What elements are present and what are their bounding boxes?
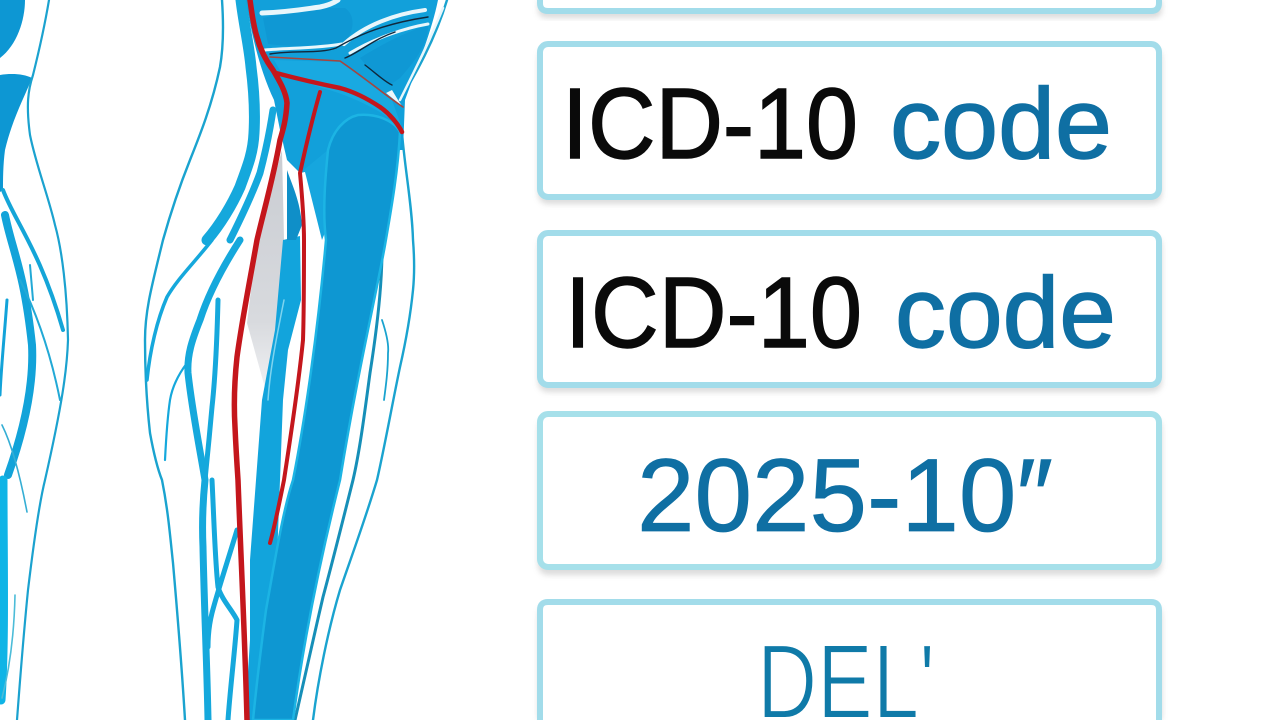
label: ICD-10 code: code: [890, 68, 1112, 180]
panel: ICD-10 code box two: [538, 233, 1162, 392]
tibial plateau: [274, 60, 402, 128]
main shin bone: [253, 115, 400, 720]
grey-white tissue area: [247, 150, 284, 395]
left leg outer contour: [17, 0, 68, 720]
label: ICD-10 code: code: [895, 257, 1116, 369]
blue between artery and bone: [300, 90, 332, 240]
panel: DEL box: [538, 602, 1162, 720]
femur condyle right: [360, 26, 428, 85]
left side muscle strands: [147, 0, 273, 720]
outer contour lines: [145, 0, 447, 720]
white joint bands: [262, 0, 443, 100]
illustration: main leg anatomy: [145, 0, 447, 720]
knee joint base: [246, 0, 438, 173]
dark joint lines: [270, 17, 428, 85]
blue between red branches: [287, 170, 302, 240]
label: 2025-10: 2025-10″: [637, 438, 1053, 554]
central band: [245, 236, 301, 720]
panel: top partial box: [538, 0, 1162, 18]
white wedge at knee side: [386, 90, 402, 106]
white streak in central band: [268, 300, 284, 400]
label: ICD-10 code: ICD-10: [562, 68, 858, 180]
panel: ICD-10 code box one: [538, 44, 1162, 204]
panel: date box: [538, 414, 1162, 575]
illustration: partial left leg: [0, 0, 68, 720]
left leg upper bone shapes: [0, 0, 32, 192]
red arteries: [234, 0, 403, 720]
femur condyle left: [263, 8, 353, 46]
left leg strands: [3, 190, 63, 330]
label: ICD-10 code: ICD-10: [565, 257, 862, 369]
